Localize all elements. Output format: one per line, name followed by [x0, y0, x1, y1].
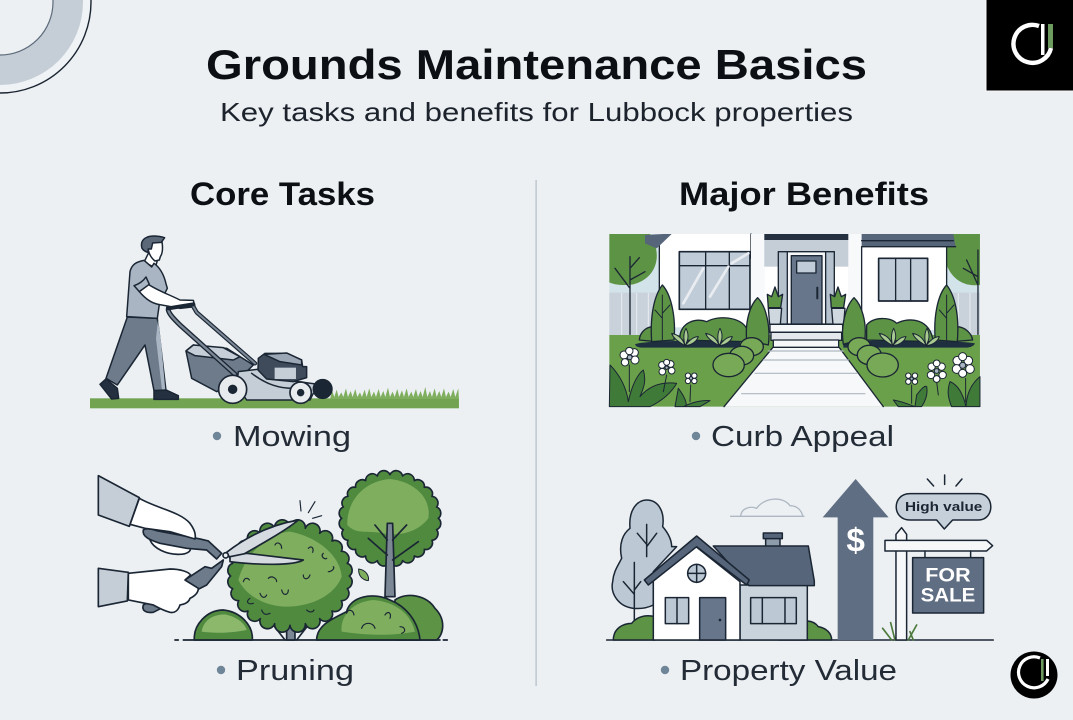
- for sale board: FOR: [925, 566, 971, 587]
- upper sleeve: [98, 476, 139, 526]
- illustration: curb appeal house front: [609, 234, 980, 407]
- foreground leaves left: [609, 365, 677, 407]
- round boxwoods right: [848, 338, 871, 356]
- lower sleeve: [98, 568, 128, 607]
- speech bubble: High value: High value: [905, 499, 982, 514]
- for sale board: [913, 558, 984, 613]
- trees behind house: [612, 500, 677, 609]
- speech bubble: High value: [896, 494, 991, 529]
- label: Property Value: Property Value: [680, 655, 897, 687]
- uncut grass: [330, 387, 459, 399]
- ground line: [175, 637, 447, 642]
- house side wall: [740, 585, 807, 640]
- label: Curb Appeal: Curb Appeal: [711, 421, 894, 453]
- falling leaf: [359, 569, 369, 581]
- for sale board: SALE: [921, 586, 975, 607]
- left window: [679, 252, 750, 309]
- hair: [142, 236, 165, 252]
- bare tree branches: [615, 250, 978, 334]
- right window: [879, 258, 928, 301]
- ground strip: [90, 398, 459, 408]
- dollar sign: $: [846, 523, 865, 560]
- upper glove: [130, 498, 195, 539]
- rear wheel: [219, 375, 247, 403]
- potted plants: [768, 308, 845, 324]
- illustration: hands pruning hedge with shears: [98, 471, 447, 640]
- low leafy plants: [672, 328, 939, 346]
- cloud: [731, 499, 804, 516]
- cone topiaries: [651, 285, 958, 345]
- front window: [665, 598, 689, 624]
- left roof corner: [645, 234, 672, 248]
- lower fingers of upper hand: [150, 538, 190, 554]
- chimney: [766, 538, 780, 557]
- heading: Major Benefits: Major Benefits: [679, 176, 929, 212]
- side roof: [713, 546, 814, 586]
- porch interior: [764, 234, 848, 324]
- sign post: [896, 528, 907, 640]
- grass tuft: [883, 623, 917, 640]
- gable roof edge: [644, 536, 749, 585]
- divider between columns: [536, 180, 537, 686]
- attention ticks: [927, 475, 962, 486]
- arm: [139, 284, 195, 308]
- house side window: [751, 598, 796, 624]
- foreground leaves right: [893, 377, 980, 407]
- small left bush: [194, 610, 252, 640]
- small right bushes: [395, 595, 443, 640]
- title: Grounds Maintenance Basics: [206, 41, 867, 88]
- sleeve: [134, 277, 149, 292]
- shrubs: [639, 318, 973, 342]
- illustration: house with value arrow and for sale sign: [607, 475, 993, 640]
- label: Mowing: Mowing: [233, 421, 351, 453]
- white flowers: [629, 365, 966, 403]
- shears blades: [227, 520, 298, 561]
- bushes beside house: [613, 616, 832, 640]
- front door: [791, 256, 822, 324]
- cut sparks: [300, 501, 322, 518]
- right wing: [862, 247, 947, 330]
- shears lower handle: [143, 560, 223, 612]
- rear leg: [106, 317, 166, 391]
- background tree: [339, 471, 441, 566]
- right background tree: [947, 234, 980, 285]
- logo: top-right black square: [986, 0, 1073, 91]
- rising value arrow: [823, 479, 889, 640]
- mower grass bag: [186, 345, 253, 392]
- neck: [144, 253, 159, 268]
- label: Pruning: Pruning: [236, 655, 354, 687]
- door frame: [778, 252, 834, 324]
- lower glove: [128, 569, 198, 612]
- door: [700, 598, 726, 640]
- logo: bottom-right black circle: [1010, 652, 1058, 698]
- round boxwoods left: [740, 338, 763, 356]
- sky backdrop: [609, 234, 980, 407]
- mulch beds: [635, 341, 975, 348]
- trunk of topiary: [273, 622, 308, 640]
- face: [148, 242, 163, 261]
- round attic window: [688, 564, 706, 582]
- mower deck: [237, 369, 323, 400]
- left wing wall: [659, 234, 751, 327]
- illustration: person mowing lawn: [90, 236, 459, 408]
- shoes: [100, 379, 119, 399]
- decorative ring: top-left corner: [0, 0, 91, 93]
- sign arm: [885, 540, 993, 551]
- shears upper handle: [143, 529, 222, 559]
- gable front wall: [653, 547, 740, 640]
- heading: Core Tasks: Core Tasks: [190, 176, 375, 212]
- front walkway: [724, 348, 883, 407]
- shirt: [127, 260, 167, 318]
- front wheel: [313, 380, 332, 398]
- porch steps: [770, 324, 843, 332]
- fences: [609, 293, 980, 335]
- ground line: [607, 638, 993, 642]
- mower engine: [258, 353, 307, 382]
- clipped round hedge: [228, 520, 352, 632]
- lawn: [609, 335, 980, 407]
- left background tree: [609, 234, 657, 285]
- mower handle: [168, 308, 235, 374]
- subtitle: Key tasks and benefits for Lubbock properties: [220, 97, 853, 127]
- porch columns: [751, 234, 764, 329]
